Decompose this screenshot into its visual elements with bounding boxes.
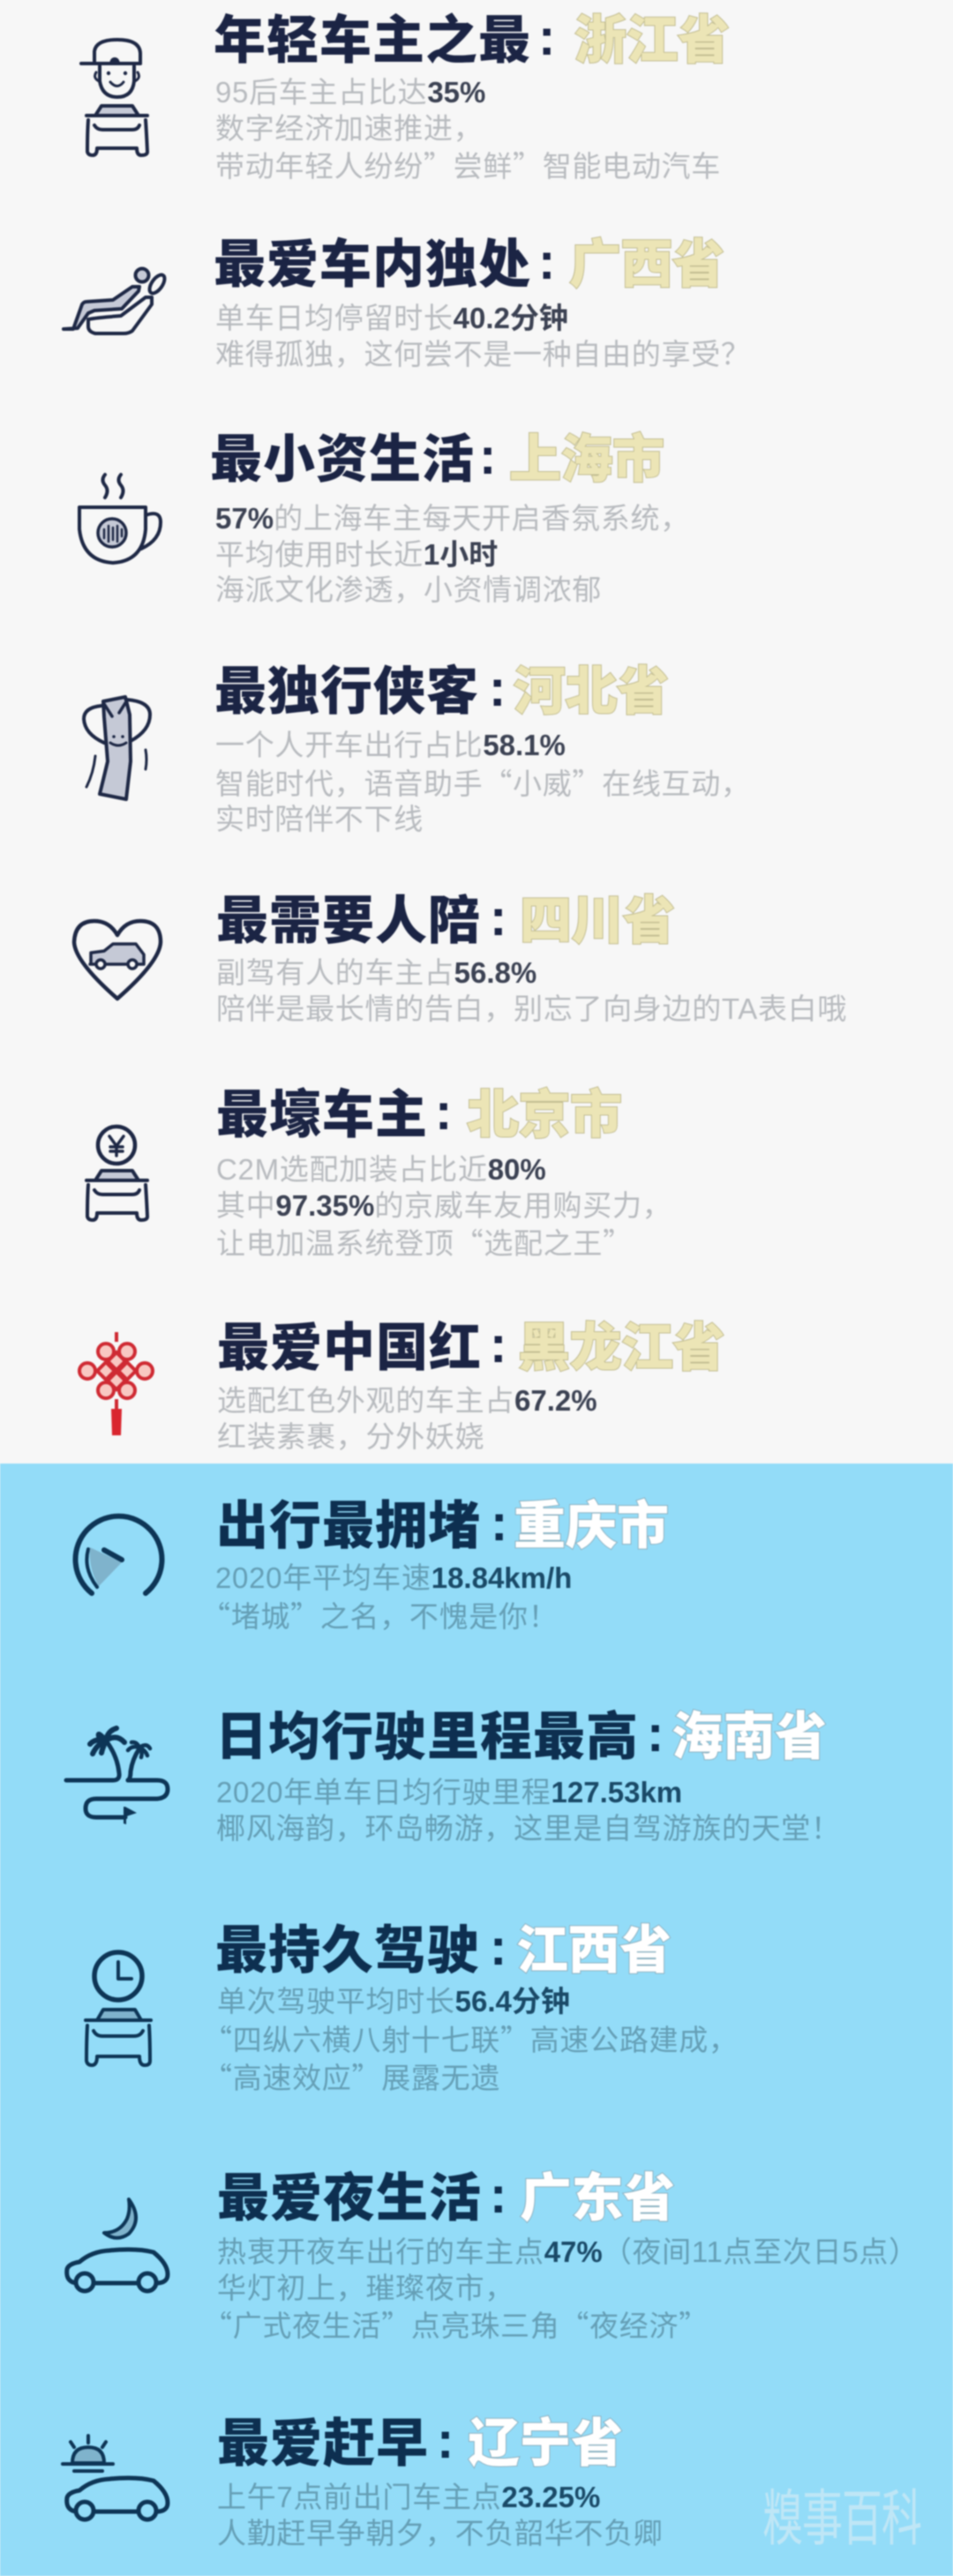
- text block: [203, 1985, 739, 2097]
- text: :: [489, 660, 507, 717]
- icon: sunrise and car: [58, 2431, 173, 2523]
- text block: 华灯初上，璀璨夜市，: [217, 2271, 514, 2304]
- text block: [216, 1153, 672, 1262]
- text block: 热衷开夜车出行的车主点47%（夜间11点至次日5点）: [217, 2235, 919, 2268]
- icon: coffee cup with steam: [77, 472, 163, 565]
- text: :: [490, 2167, 507, 2224]
- text: :: [479, 428, 497, 485]
- text block: [216, 956, 847, 1025]
- panel: 最爱中国红 黑龙江省: [77, 39, 725, 2235]
- text block: 智能时代，语音助手“小威”在线互动，: [215, 760, 751, 803]
- heading: 最壕车主: [216, 1086, 428, 1144]
- text block: 单车日均停留时长40.2分钟: [215, 302, 568, 334]
- icon: smiling seat belt: [81, 694, 153, 802]
- heading: 最持久驾驶: [215, 1921, 480, 1980]
- text block: “四纵六横八射十七联”高速公路建成，: [203, 2017, 739, 2059]
- text: 黑龙江省: [518, 1319, 724, 1377]
- heading: [210, 428, 664, 489]
- text: 广西省: [569, 236, 724, 294]
- icon: Chinese knot: [77, 1331, 155, 1436]
- panel: 最持久驾驶 江西省: [83, 39, 739, 2235]
- panel: 年轻车主之最 浙江省: [79, 9, 730, 2235]
- text block: 难得孤独，这何尝不是一种自由的享受？: [215, 337, 751, 371]
- text block: 95后车主占比达35%: [215, 76, 485, 109]
- text block: 副驾有人的车主占56.8%: [216, 956, 537, 989]
- text block: 选配红色外观的车主占67.2%: [217, 1384, 597, 1417]
- text block: [216, 1776, 841, 1844]
- heading: 最爱车内独处: [214, 236, 531, 294]
- text block: 人勤赶早争朝夕，不负韶华不负卿: [217, 2516, 664, 2550]
- icon: speedometer: [72, 1512, 166, 1597]
- heading: 最爱中国红: [217, 1319, 482, 1377]
- text block: [217, 2480, 664, 2551]
- heading: 最独行侠客: [214, 663, 479, 721]
- heading: [215, 1919, 672, 1980]
- heading: 最小资生活: [210, 431, 475, 489]
- text block: 其中97.35%的京威车友用购买力，: [216, 1189, 672, 1221]
- text: :: [437, 2412, 454, 2469]
- text block: 一个人开车出行占比58.1%: [215, 729, 566, 761]
- heading: 日均行驶里程最高: [215, 1708, 639, 1766]
- text: 辽宁省: [468, 2415, 623, 2473]
- heading: [214, 233, 724, 294]
- text block: C2M选配加装占比近80%: [216, 1153, 546, 1186]
- text: 江西省: [516, 1921, 672, 1980]
- panel: 最独行侠客 河北省: [81, 39, 751, 2235]
- heading: 最爱赶早: [217, 2415, 429, 2473]
- text block: [217, 1384, 597, 1452]
- heading: [216, 1083, 622, 1144]
- text block: [215, 76, 721, 185]
- text block: [215, 502, 690, 606]
- icon: clock and car: [83, 1949, 154, 2068]
- icon: moon and car: [62, 2195, 173, 2296]
- text block: 平均使用时长近1小时: [215, 538, 498, 570]
- text: :: [538, 233, 556, 290]
- text block: 带动年轻人纷纷”尝鲜”智能电动汽车: [215, 143, 721, 185]
- panel: 出行最拥堵 重庆市: [72, 39, 669, 2235]
- icon: young driver with car: [79, 37, 150, 158]
- heading: [214, 660, 669, 721]
- panel: 最爱夜生活 广东省: [0, 0, 953, 9]
- text: 海南省: [672, 1708, 827, 1766]
- text block: 海派文化渗透，小资情调浓郁: [215, 573, 602, 606]
- panel: 最爱赶早 辽宁省: [0, 0, 953, 9]
- text: :: [491, 1494, 508, 1552]
- heading: [214, 9, 730, 70]
- text: :: [435, 1083, 453, 1141]
- icon: heart with car: [71, 917, 164, 1002]
- text block: 单次驾驶平均时长56.4分钟: [217, 1985, 570, 2018]
- text: 重庆市: [514, 1497, 669, 1555]
- panel: 最爱车内独处 广西省: [61, 39, 751, 2235]
- text block: [215, 302, 751, 371]
- panel: 最小资生活 上海市: [77, 39, 690, 2235]
- text block: 椰风海韵，环岛畅游，这里是自驾游族的天堂！: [216, 1812, 841, 1844]
- text block: [217, 2235, 919, 2345]
- text: :: [490, 1919, 507, 1976]
- panel: blue lower section background: [0, 1464, 953, 2576]
- text block: [215, 729, 751, 835]
- text: 广东省: [520, 2169, 675, 2228]
- text block: 57%的上海车主每天开启香氛系统，: [215, 502, 690, 535]
- heading: 最爱夜生活: [217, 2169, 482, 2228]
- text: 四川省: [520, 892, 675, 950]
- text block: “高速效应”展露无遗: [203, 2055, 500, 2097]
- heading: 出行最拥堵: [216, 1497, 481, 1555]
- icon: yen coin and car: [84, 1124, 150, 1223]
- text block: 上午7点前出门车主点23.25%: [217, 2481, 600, 2513]
- text block: 数字经济加速推进，: [215, 111, 483, 145]
- text block: 实时陪伴不下线: [215, 803, 424, 835]
- heading: 最需要人陪: [216, 892, 481, 950]
- heading: 年轻车主之最: [214, 11, 531, 70]
- text: 上海市: [509, 431, 664, 489]
- icon: reclining seat: [61, 266, 168, 336]
- text block: “堵城”之名，不愧是你！: [201, 1593, 558, 1636]
- heading: [216, 889, 675, 950]
- text block: 2020年平均车速18.84km/h: [215, 1561, 572, 1594]
- text: :: [647, 1705, 664, 1763]
- watermark: 糗事百科: [762, 2470, 921, 2558]
- heading: [217, 1316, 725, 1377]
- text block: [201, 1561, 572, 1636]
- panel: 最壕车主 北京市: [84, 39, 672, 2235]
- text block: “广式夜生活”点亮珠三角“夜经济”: [203, 2303, 709, 2345]
- text block: 让电加温系统登顶“选配之王”: [216, 1220, 633, 1262]
- text: :: [490, 889, 507, 947]
- panel: 最需要人陪 四川省: [71, 39, 847, 2235]
- text: 河北省: [514, 663, 669, 721]
- text block: 红装素裹，分外妖娆: [217, 1420, 484, 1452]
- text block: 2020年单车日均行驶里程127.53km: [216, 1776, 682, 1808]
- text block: 陪伴是最长情的告白，别忘了向身边的TA表白哦: [216, 992, 847, 1025]
- icon: palm trees and road: [64, 1725, 171, 1825]
- heading: [216, 1494, 669, 1555]
- panel: 日均行驶里程最高 海南省: [64, 39, 841, 2235]
- text: 北京市: [467, 1086, 622, 1144]
- text: :: [538, 9, 556, 66]
- heading: [215, 1705, 827, 1766]
- text: 浙江省: [574, 11, 730, 70]
- text: :: [490, 1316, 507, 1374]
